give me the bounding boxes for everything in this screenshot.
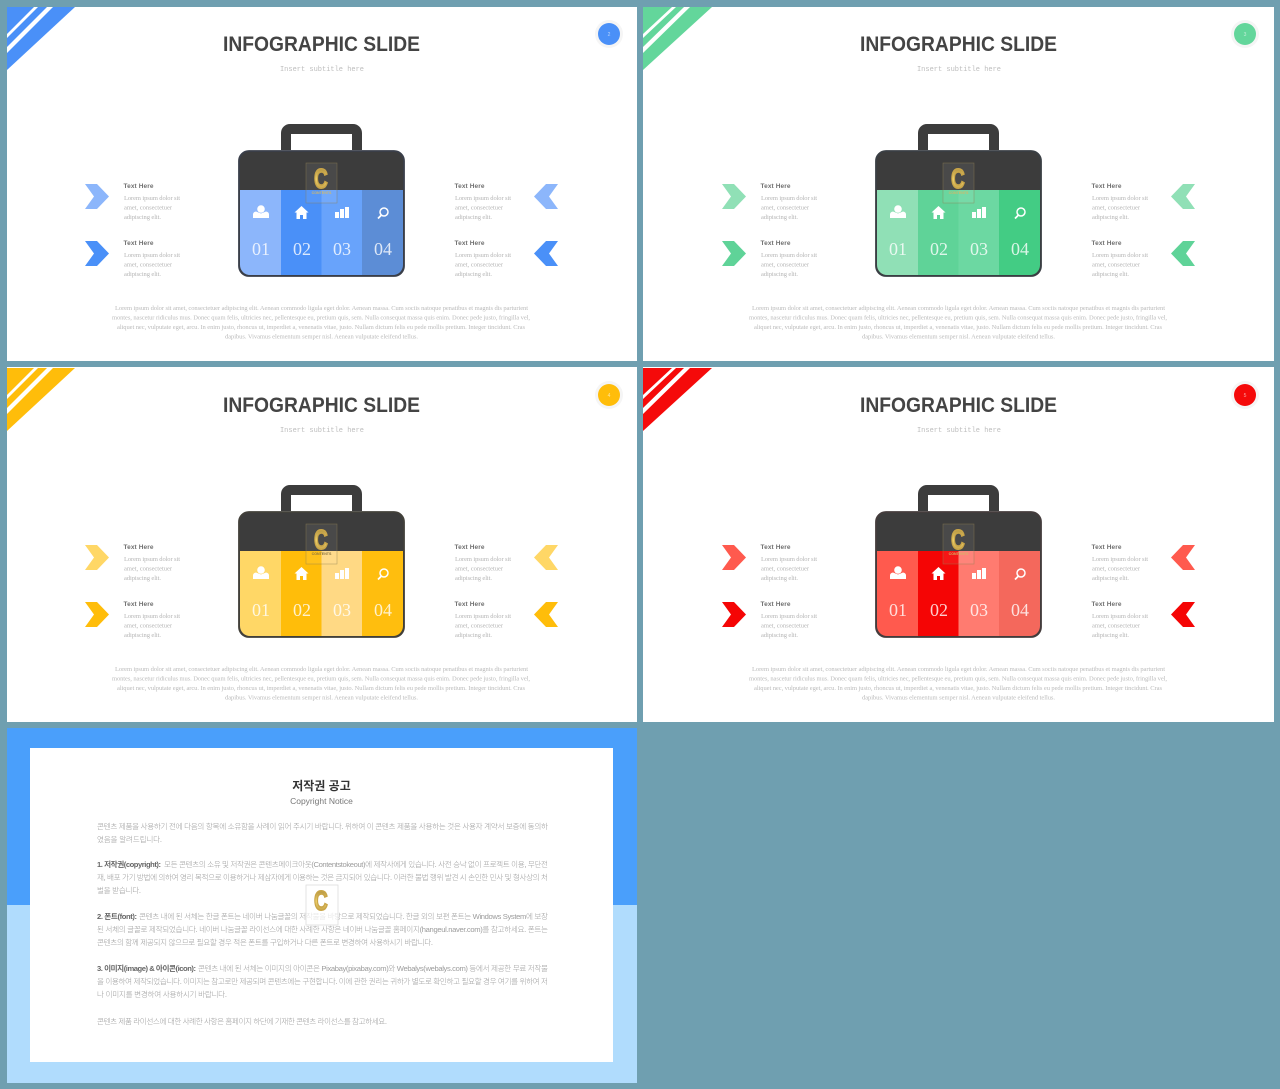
numbers: 04 [374,600,392,620]
text block: left bottom: Lorem ipsum dolor sit [124,613,180,620]
paragraph [112,666,530,702]
text block: left top: Text Here [124,183,154,190]
arrow: left top [85,184,109,209]
text block: right top: Lorem ipsum dolor sit [1092,556,1148,563]
text block: left bottom [760,601,817,639]
paragraph: dapibus. Vivamus elementum semper nisl. Aenean vulputate eleifend tellus. [225,334,418,340]
page badge: 3 [1244,32,1247,38]
text block: left top: Text Here [760,544,791,551]
text block: left top: Lorem ipsum dolor sit [124,556,180,563]
logo: CONTENTS [312,552,332,556]
page badge [595,381,623,409]
text block: left bottom: Text Here [760,601,791,608]
text block: right bottom: Lorem ipsum dolor sit [455,252,511,259]
text block: left bottom [124,240,180,278]
text block: right bottom: amet, consectetuer [1092,622,1141,630]
intro text: 콘텐츠 제품을 사용하기 전에 다음의 항목에 소유함을 사례이 읽어 주시기 바랍니다. 위하여 이 콘텐츠 제품을 사용하는 것은 사용자 계약서 보증에 동의하 [97,821,548,831]
copyright subheading: Copyright Notice [290,796,353,806]
text block: right top: adipiscing elit. [455,214,492,221]
section 3 text [97,963,548,999]
section 2 text [97,911,548,947]
text block: right top: Lorem ipsum dolor sit [455,195,511,202]
text block: left top [124,183,180,221]
section 3 text: 3. 이미지(image) & 아이콘(icon): [97,963,196,973]
section 1 text: 벌을 받습니다. [97,886,141,895]
text block: right bottom: adipiscing elit. [1092,271,1129,278]
paragraph [749,666,1167,702]
corner ribbon [643,7,712,70]
logo [306,524,337,564]
text block: right top: amet, consectetuer [1092,566,1141,572]
text block: right bottom: adipiscing elit. [455,271,492,278]
numbers: 02 [293,600,311,620]
text block: left top: amet, consectetuer [124,566,173,572]
text block: left bottom: amet, consectetuer [124,622,173,630]
text block: right top: adipiscing elit. [1092,214,1129,221]
arrow: left top [722,545,746,570]
text block: right top [454,183,511,221]
arrow: right bottom [1171,602,1195,627]
page badge [1231,381,1259,409]
paragraph: Lorem ipsum dolor sit amet, consectetuer adipiscing elit. Aenean commodo ligula eget dolor. Aenean massa. Cum sociis natoque penatibus et magnis dis parturient [752,305,1165,312]
text block: right top: Lorem ipsum dolor sit [455,556,511,563]
subtitle: Insert subtitle here [917,66,1001,74]
text block: right top [1092,544,1148,582]
icons [253,205,388,219]
text block: left bottom: amet, consectetuer [124,262,173,268]
logo: CONTENTS [949,552,969,556]
numbers: 01 [252,239,270,259]
logo [943,524,974,564]
numbers [889,600,1029,620]
text block: right top: adipiscing elit. [455,575,492,582]
text block: right bottom: adipiscing elit. [455,632,492,639]
text block: left top: Lorem ipsum dolor sit [124,195,180,202]
logo: C [314,524,328,556]
arrow: right top [534,545,558,570]
panel: copyright notice [7,728,637,1083]
arrow: left top [85,545,109,570]
paragraph [749,305,1167,340]
paragraph: aliquet nec, vulputate eget, arcu. In enim justo, rhoncus ut, imperdiet a, venenatis vitae, justo. Nullam dictum felis eu pede mollis pretium. Integer tincidunt. Cras [754,685,1162,692]
numbers [252,600,392,620]
arrow: right bottom [534,602,558,627]
text block: right top: Text Here [454,544,485,551]
text block: left bottom: amet, consectetuer [761,262,810,268]
text block: right top: amet, consectetuer [455,566,504,572]
text block: left bottom [124,601,180,639]
text block: right bottom: Text Here [1092,601,1122,608]
text block: right bottom: adipiscing elit. [1092,632,1129,639]
numbers [889,239,1029,259]
text block: right bottom: amet, consectetuer [455,262,504,268]
subtitle: Insert subtitle here [917,427,1001,435]
briefcase chart [876,129,1041,276]
numbers: 01 [889,239,907,259]
text block: left top: amet, consectetuer [761,204,810,212]
arrow: left bottom [85,241,109,266]
text block: left top: adipiscing elit. [124,214,161,221]
title: INFOGRAPHIC SLIDE [860,33,1057,56]
paragraph: Lorem ipsum dolor sit amet, consectetuer adipiscing elit. Aenean commodo ligula eget dolor. Aenean massa. Cum sociis natoque penatibus et magnis dis parturient [115,666,528,673]
logo: C [314,163,328,195]
text block: left top: Lorem ipsum dolor sit [761,556,817,563]
paragraph: dapibus. Vivamus elementum semper nisl. Aenean vulputate eleifend tellus. [862,334,1055,340]
paragraph: montes, nascetur ridiculus mus. Donec quam felis, ultricies nec, pellentesque eu, pretium quis, sem. Nulla consequat massa quis enim. Donec pede justo, fringilla vel, [749,676,1167,682]
logo: C [951,163,965,195]
text block: left bottom: adipiscing elit. [124,632,161,639]
briefcase chart [239,490,404,637]
numbers: 02 [930,239,948,259]
logo: CONTENTS [312,191,332,195]
logo [943,163,974,203]
icons [890,566,1025,580]
logo: CONTENTS [949,191,969,195]
copyright heading: 저작권 공고 [292,778,351,793]
text block: left bottom: adipiscing elit. [124,271,161,278]
text block: left top: amet, consectetuer [761,566,810,572]
numbers: 03 [970,600,988,620]
paragraph: montes, nascetur ridiculus mus. Donec quam felis, ultricies nec, pellentesque eu, pretium quis, sem. Nulla consequat massa quis enim. Donec pede justo, fringilla vel, [749,314,1167,322]
section 1 text: 1. 저작권(copyright): [97,859,161,869]
numbers: 02 [930,600,948,620]
arrow: left top [722,184,746,209]
closing text: 콘텐츠 제품 라이선스에 대한 사례한 사항은 홈페이지 하단에 기재한 콘텐츠 라이선스를 참고하세요. [97,1016,387,1026]
text block: right bottom: Text Here [454,601,485,608]
text block: right bottom: Lorem ipsum dolor sit [1092,252,1148,259]
text block: right top: amet, consectetuer [1092,204,1141,212]
paragraph: montes, nascetur ridiculus mus. Donec quam felis, ultricies nec, pellentesque eu, pretium quis, sem. Nulla consequat massa quis enim. Donec pede justo, fringilla vel, [112,314,530,322]
text block: right top: Text Here [1092,544,1122,551]
text block: left bottom: Text Here [124,601,154,608]
text block: left bottom: amet, consectetuer [761,622,810,630]
corner ribbon [7,368,75,431]
page badge [595,20,623,48]
text block: right top: Text Here [454,183,485,190]
text block: right top: Text Here [1092,183,1122,190]
arrow: left bottom [722,602,746,627]
section 1 text: 모든 콘텐츠의 소유 및 저작권은 콘텐츠메이크아웃(Contentstokeout)에 제작사에게 있습니다. 사전 승낙 없이 프로젝트 이용, 무단전 [164,859,548,869]
numbers [252,239,392,259]
text block: right bottom: amet, consectetuer [455,622,504,630]
text block: left top: Lorem ipsum dolor sit [761,195,817,202]
intro text [97,821,548,844]
logo: C [314,885,328,917]
arrow: left bottom [722,241,746,266]
paragraph: montes, nascetur ridiculus mus. Donec quam felis, ultricies nec, pellentesque eu, pretium quis, sem. Nulla consequat massa quis enim. Donec pede justo, fringilla vel, [112,676,530,682]
panel: blue slide [7,7,637,361]
numbers: 01 [252,600,270,620]
text block: left bottom: adipiscing elit. [761,632,798,639]
text block: right bottom: Lorem ipsum dolor sit [455,613,511,620]
text block: right bottom: amet, consectetuer [1092,262,1141,268]
text block: left bottom: Lorem ipsum dolor sit [761,613,817,620]
text block: right top: adipiscing elit. [1092,575,1129,582]
briefcase chart [876,490,1041,637]
section 1 text: 재, 배포 가기 방법에 의하여 영리 목적으로 이용하거나 제삼자에게 이용하는 것은 금지되어 있습니다. 이러한 불법 행위 발견 시 손인한 민사 및 형사상의 처 [97,872,548,882]
numbers: 03 [970,239,988,259]
subtitle: Insert subtitle here [280,427,364,435]
icons [890,205,1025,219]
paragraph: Lorem ipsum dolor sit amet, consectetuer adipiscing elit. Aenean commodo ligula eget dolor. Aenean massa. Cum sociis natoque penatibus et magnis dis parturient [752,666,1165,673]
text block: right bottom: Text Here [454,240,485,247]
section 2 text: 콘텐츠의 함께 제공되지 않으므로 필요할 경우 적은 폰트를 구입하거나 다른 폰트로 변경하여 사용하시기 바랍니다. [97,937,433,947]
text block: left bottom [760,240,817,278]
page badge: 5 [1244,393,1247,399]
arrow: left bottom [85,602,109,627]
numbers: 03 [333,239,351,259]
text block: left top [760,183,817,221]
text block: left bottom: adipiscing elit. [761,271,798,278]
section 3 text: 콘텐츠 내에 된 서체는 이미지의 아이콘은 Pixabay(pixabay.com)와 Webalys(webalys.com) 등에서 제공한 무료 저작물 [198,963,548,973]
arrow: right top [534,184,558,209]
text block: right bottom [454,240,511,278]
page badge: 2 [608,32,611,38]
text block: left top: adipiscing elit. [761,575,798,582]
paragraph: aliquet nec, vulputate eget, arcu. In enim justo, rhoncus ut, imperdiet a, venenatis vitae, justo. Nullam dictum felis eu pede mollis pretium. Integer tincidunt. Cras [117,324,525,331]
text block: right bottom: Text Here [1092,240,1122,247]
paragraph: dapibus. Vivamus elementum semper nisl. Aenean vulputate eleifend tellus. [225,694,418,702]
paragraph: Lorem ipsum dolor sit amet, consectetuer adipiscing elit. Aenean commodo ligula eget dolor. Aenean massa. Cum sociis natoque penatibus et magnis dis parturient [115,305,528,312]
numbers: 03 [333,600,351,620]
text block: right top: Lorem ipsum dolor sit [1092,195,1148,202]
numbers: 04 [1011,600,1029,620]
text block: left bottom: Lorem ipsum dolor sit [124,252,180,259]
section 2 text: 된 서체의 글꼴로 제작되었습니다. 네이버 나눔글꼴 라이선스에 대한 사례한 사항은 네이버 나눔글꼴 홈페이지(hangeul.naver.com)를 참고하세요. 폰트는 [97,924,548,934]
panel: red slide [643,367,1274,722]
logo: C [951,524,965,556]
logo [306,163,337,203]
numbers: 04 [1011,239,1029,259]
panel: green slide [643,7,1274,361]
section 2 text: 2. 폰트(font): [97,912,137,921]
text block: left bottom: Text Here [124,240,154,247]
icons [253,566,388,580]
text block: right top [454,544,511,582]
page badge: 4 [608,393,611,399]
arrow: right top [1171,184,1195,209]
corner ribbon [7,7,75,70]
panel: yellow slide [7,367,637,722]
text block: left top [124,544,180,582]
section 1 text [97,859,548,895]
paragraph: dapibus. Vivamus elementum semper nisl. Aenean vulputate eleifend tellus. [862,694,1055,702]
numbers: 01 [889,600,907,620]
text block: right bottom [454,601,511,639]
subtitle: Insert subtitle here [280,66,364,74]
paragraph [112,305,530,340]
paragraph: aliquet nec, vulputate eget, arcu. In enim justo, rhoncus ut, imperdiet a, venenatis vitae, justo. Nullam dictum felis eu pede mollis pretium. Integer tincidunt. Cras [754,324,1162,331]
arrow: right top [1171,545,1195,570]
text block: left top: Text Here [760,183,791,190]
text block: left bottom: Lorem ipsum dolor sit [761,252,817,259]
text block: right bottom [1092,601,1148,639]
section 2 text: 콘텐츠 내에 된 서체는 한글 폰트는 네이버 나눔글꼴의 저작물을 바탕으로 제작되었습니다. 한글 외의 보편 폰트는 Windows System에 보장 [139,911,548,921]
logo [306,885,338,925]
text block: right bottom [1092,240,1148,278]
numbers: 02 [293,239,311,259]
title: INFOGRAPHIC SLIDE [860,394,1057,417]
text block: left bottom: Text Here [760,240,791,247]
section 3 text: 나 이미지를 변경하여 사용하시기 바랍니다. [97,989,227,999]
title: INFOGRAPHIC SLIDE [223,394,420,417]
briefcase chart [239,129,404,276]
corner ribbon [643,368,712,431]
text block: left top [760,544,817,582]
text block: left top: adipiscing elit. [761,214,798,221]
paragraph: aliquet nec, vulputate eget, arcu. In enim justo, rhoncus ut, imperdiet a, venenatis vitae, justo. Nullam dictum felis eu pede mollis pretium. Integer tincidunt. Cras [117,685,525,692]
arrow: right bottom [534,241,558,266]
text block: left top: adipiscing elit. [124,575,161,582]
page badge [1231,20,1259,48]
section 3 text: 을 이용하여 제작되었습니다. 이미지는 참고로만 제공되며 콘텐츠에는 구현합니다. 이에 관한 권리는 귀하가 별도로 확인하고 필요할 경우 여기를 위하여 저 [97,976,548,986]
numbers: 04 [374,239,392,259]
text block: left top: amet, consectetuer [124,204,173,212]
title: INFOGRAPHIC SLIDE [223,33,420,56]
text block: right top [1092,183,1148,221]
text block: right top: amet, consectetuer [455,204,504,212]
text block: right bottom: Lorem ipsum dolor sit [1092,613,1148,620]
arrow: right bottom [1171,241,1195,266]
intro text: 였음을 알려드립니다. [97,835,162,844]
text block: left top: Text Here [124,544,154,551]
